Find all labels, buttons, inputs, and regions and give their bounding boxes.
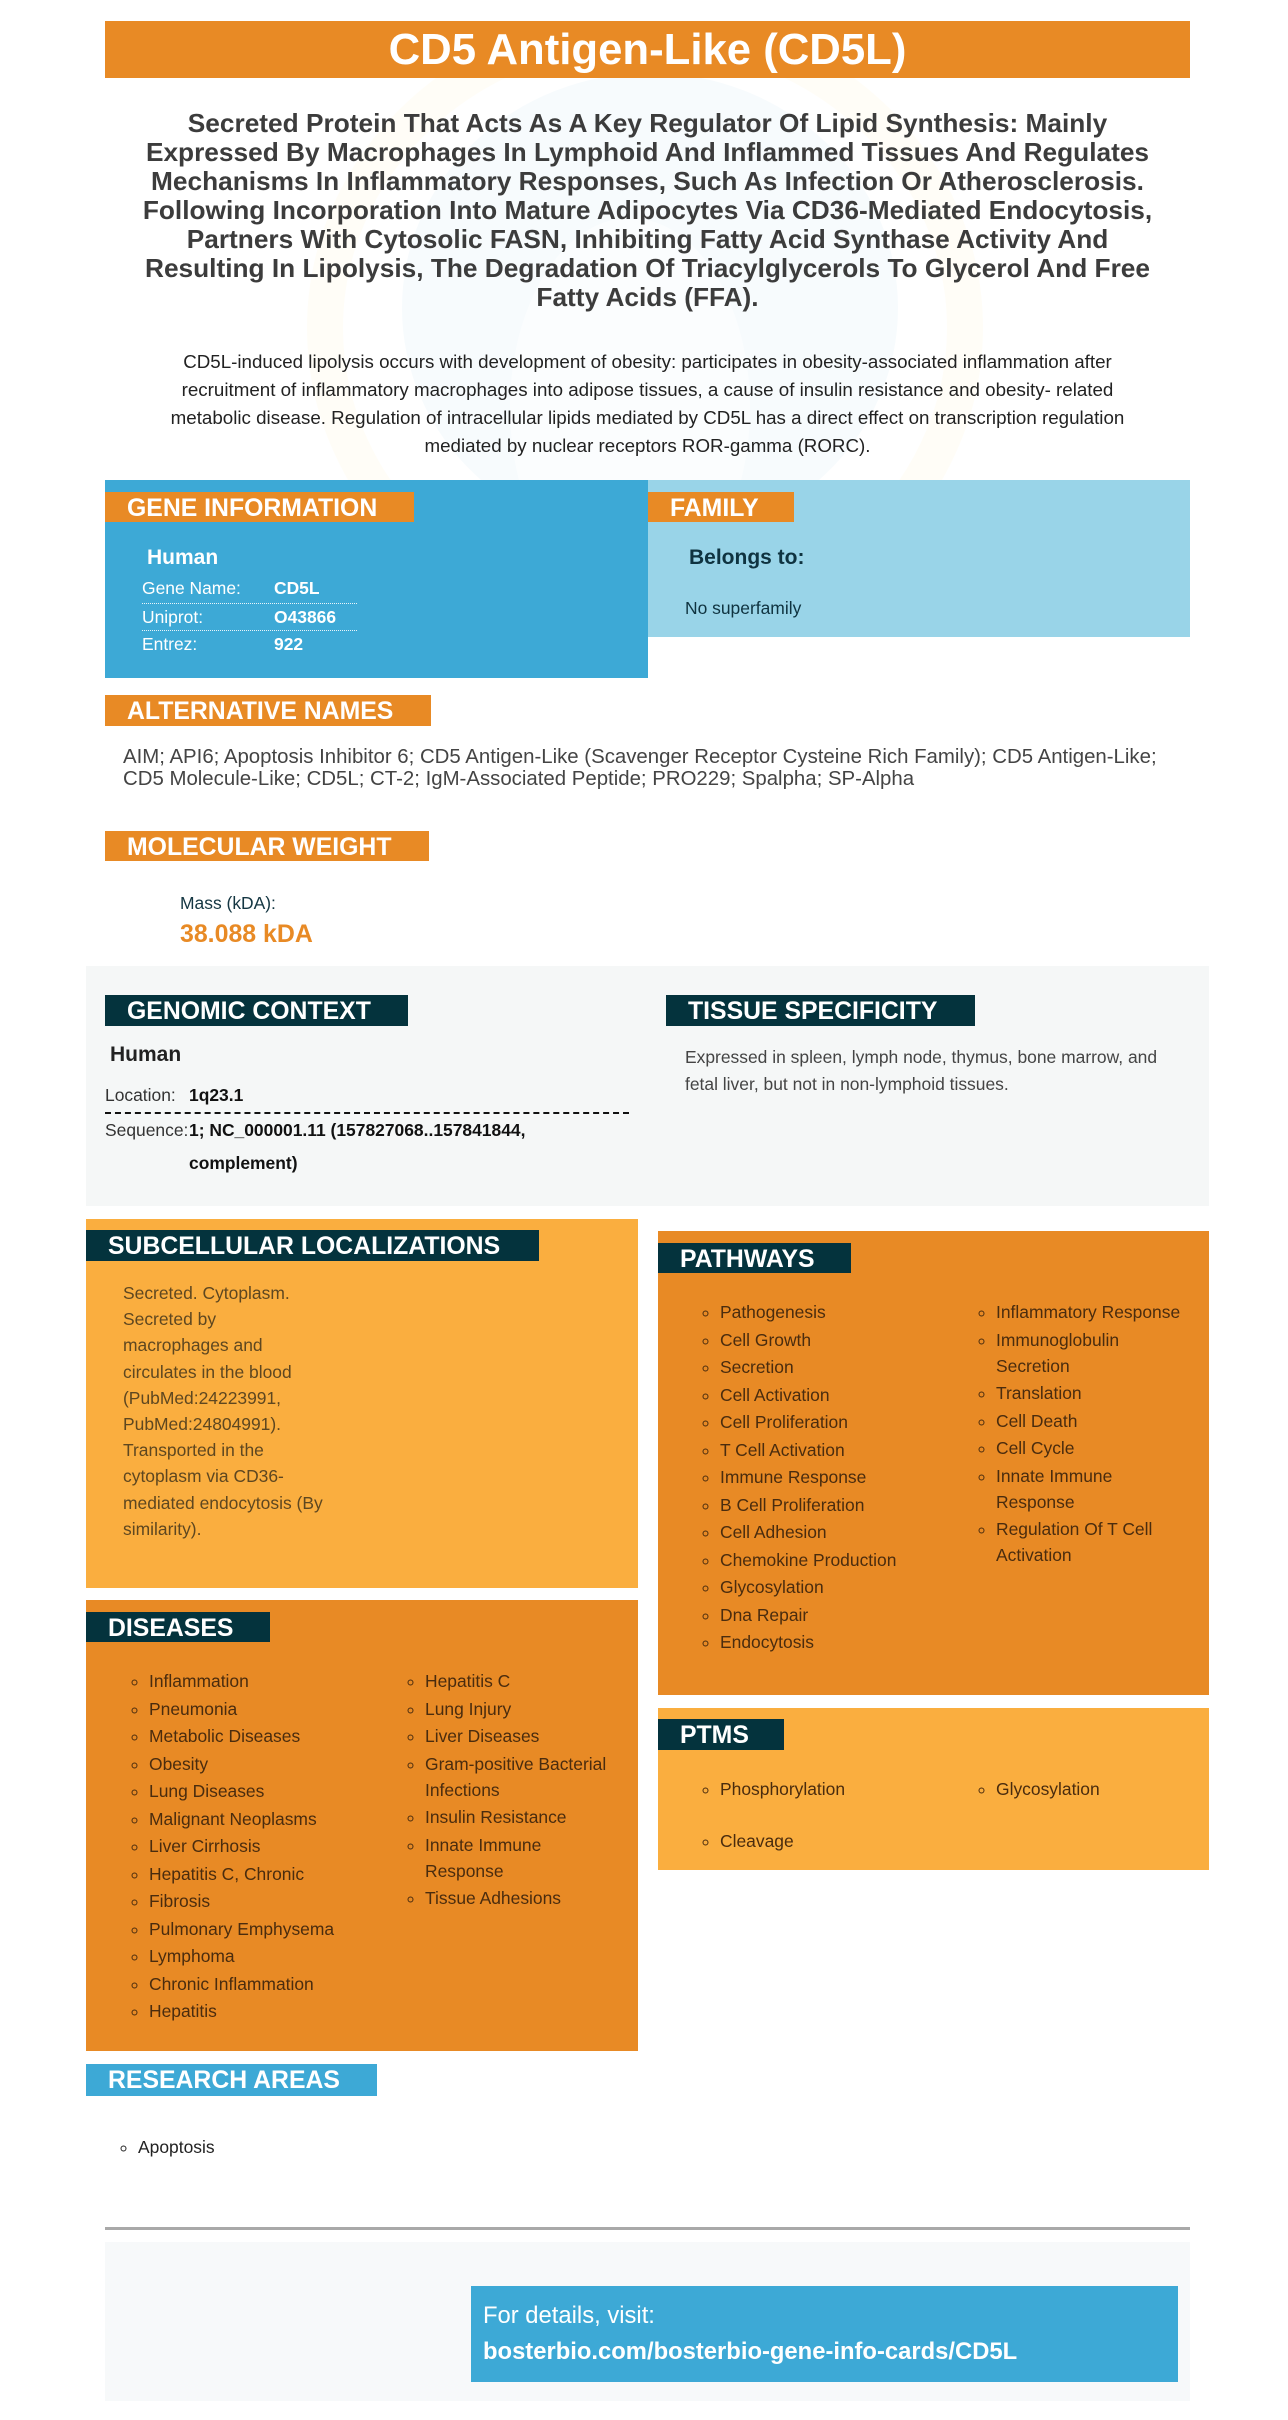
pathways list column 2: Response — [996, 1492, 1075, 1512]
localization text: Secreted. Cytoplasm. — [123, 1283, 290, 1303]
pathways list column 2: Activation — [996, 1545, 1072, 1565]
heading: subcellular localizations: SUBCELLULAR LOCALIZATIONS — [108, 1233, 500, 1260]
diseases list column 1: Malignant Neoplasms — [149, 1808, 317, 1828]
panel: genomic context and tissue specificity — [86, 966, 1209, 1206]
pathways list column 2: Inflammatory Response — [996, 1302, 1180, 1322]
diseases list column 1 — [132, 1671, 334, 2021]
gene name row — [142, 575, 357, 604]
pathways list column 1: Glycosylation — [720, 1577, 824, 1597]
heading: diseases — [86, 1612, 270, 1642]
title banner: CD5 Antigen-Like (CD5L) — [389, 25, 906, 74]
pathways list column 1: Chemokine Production — [720, 1550, 896, 1570]
subtitle: Expressed By Macrophages In Lymphoid And Inflammed Tissues And Regulates — [146, 137, 1149, 167]
pathways list column 1: T Cell Activation — [720, 1440, 845, 1460]
location row — [105, 1082, 629, 1114]
entrez row: 922 — [274, 634, 303, 654]
diseases list column 2 — [408, 1671, 606, 1908]
gene name row: Gene Name: — [142, 578, 241, 598]
pathways list column 1 — [702, 1302, 896, 1652]
description paragraph — [171, 351, 1124, 456]
family value: No superfamily — [685, 598, 801, 618]
pathways list column 1: Immune Response — [720, 1467, 866, 1487]
mass label: Mass (kDA): — [180, 893, 276, 913]
pathways list column 1: Secretion — [720, 1357, 794, 1377]
heading: family — [648, 492, 794, 522]
localization text: (PubMed:24223991, — [123, 1388, 281, 1408]
heading: alternative names: ALTERNATIVE NAMES — [127, 698, 393, 725]
localization text: cytoplasm via CD36- — [123, 1466, 284, 1486]
subtitle: Partners With Cytosolic FASN, Inhibiting Fatty Acid Synthase Activity And — [187, 224, 1108, 254]
diseases list column 1: Fibrosis — [149, 1891, 210, 1911]
localization text: macrophages and — [123, 1335, 263, 1355]
alternative names text: CD5 Molecule-Like; CD5L; CT-2; IgM-Associated Peptide; PRO229; Spalpha; SP-Alpha — [123, 768, 914, 790]
diseases list column 2: Innate Immune — [425, 1834, 541, 1854]
diseases list column 1: Lung Diseases — [149, 1781, 264, 1801]
sequence row — [105, 1120, 525, 1173]
subtitle: Following Incorporation Into Mature Adipocytes Via CD36-Mediated Endocytosis, — [143, 195, 1152, 225]
pathways list column 1: Endocytosis — [720, 1632, 814, 1652]
sequence row: Sequence: — [105, 1120, 188, 1140]
localization text: Secreted by — [123, 1309, 216, 1329]
heading: ptms: PTMS — [680, 1722, 749, 1749]
heading: gene information: GENE INFORMATION — [127, 495, 377, 522]
pathways list column 1: B Cell Proliferation — [720, 1494, 864, 1514]
description paragraph: CD5L-induced lipolysis occurs with development of obesity: participates in obesity-associated inflammation after — [183, 351, 1112, 372]
heading: tissue specificity: TISSUE SPECIFICITY — [688, 998, 937, 1025]
pathways list column 1: Cell Growth — [720, 1330, 811, 1350]
entrez row — [142, 634, 303, 654]
pathways list column 1: Cell Adhesion — [720, 1522, 827, 1542]
ptm list column 1 — [702, 1779, 845, 1851]
panel: diseases — [86, 1600, 638, 2051]
belongs to label: Belongs to: — [689, 546, 804, 569]
diseases list column 2: Tissue Adhesions — [425, 1888, 561, 1908]
research areas list: Apoptosis — [138, 2137, 215, 2157]
heading: genomic context: GENOMIC CONTEXT — [127, 998, 371, 1025]
localization text: mediated endocytosis (By — [123, 1493, 323, 1513]
panel: pathways — [658, 1231, 1209, 1695]
subtitle: Resulting In Lipolysis, The Degradation Of Triacylglycerols To Glycerol And Free — [145, 253, 1150, 283]
panel: gene information — [105, 480, 648, 678]
pathways list column 2: Regulation Of T Cell — [996, 1519, 1152, 1539]
location row: 1q23.1 — [189, 1085, 243, 1105]
diseases list column 1: Metabolic Diseases — [149, 1726, 300, 1746]
molecular weight value — [180, 893, 313, 948]
callout url: bosterbio.com/bosterbio-gene-info-cards/CD5L — [483, 2338, 1017, 2365]
entrez row: Entrez: — [142, 634, 197, 654]
diseases list column 1: Hepatitis C, Chronic — [149, 1864, 304, 1884]
gene name row: CD5L — [274, 578, 320, 598]
description paragraph: recruitment of inflammatory macrophages into adipose tissues, a cause of insulin resistance and obesity- related — [182, 379, 1113, 400]
pathways list column 2: Innate Immune — [996, 1466, 1112, 1486]
pathways list column 2: Cell Death — [996, 1410, 1077, 1430]
panel: ptms — [658, 1708, 1209, 1870]
pathways list column 1: Pathogenesis — [720, 1302, 826, 1322]
sequence row: 1; NC_000001.11 (157827068..157841844, — [189, 1120, 525, 1140]
ptm list column 1: Cleavage — [720, 1831, 794, 1851]
tissue specificity text: Expressed in spleen, lymph node, thymus, bone marrow, and — [685, 1047, 1157, 1067]
mass value: 38.088 kDA — [180, 920, 313, 948]
diseases list column 2: Hepatitis C — [425, 1671, 510, 1691]
heading: molecular weight: MOLECULAR WEIGHT — [127, 834, 391, 861]
diseases list column 1: Pulmonary Emphysema — [149, 1918, 334, 1938]
panel: family — [648, 480, 1190, 637]
localization text: similarity). — [123, 1519, 201, 1539]
callout: details link — [471, 2286, 1178, 2382]
localization text — [123, 1283, 323, 1539]
ptm list column 1: Phosphorylation — [720, 1779, 845, 1799]
species label: Human — [147, 546, 218, 569]
pathways list column 2: Immunoglobulin — [996, 1330, 1119, 1350]
localization text: PubMed:24804991). — [123, 1414, 281, 1434]
localization text: circulates in the blood — [123, 1362, 292, 1382]
alternative names text: AIM; API6; Apoptosis Inhibitor 6; CD5 Antigen-Like (Scavenger Receptor Cysteine Rich Family); CD5 Antigen-Like; — [123, 746, 1157, 768]
pathways list column 1: Cell Activation — [720, 1384, 830, 1404]
species label: Human — [110, 1043, 181, 1066]
diseases list column 2: Liver Diseases — [425, 1726, 539, 1746]
pathways list column 1: Cell Proliferation — [720, 1412, 848, 1432]
alternative names text — [123, 746, 1157, 790]
heading: pathways: PATHWAYS — [680, 1246, 815, 1273]
subtitle — [143, 108, 1152, 312]
location row: Location: — [105, 1085, 176, 1105]
diseases list column 1: Liver Cirrhosis — [149, 1836, 260, 1856]
diseases list column 1: Hepatitis — [149, 2001, 217, 2021]
subtitle: Fatty Acids (FFA). — [536, 282, 759, 312]
ptm list column 2: Glycosylation — [996, 1779, 1100, 1799]
pathways list column 2: Translation — [996, 1383, 1082, 1403]
tissue specificity text: fetal liver, but not in non-lymphoid tissues. — [685, 1074, 1009, 1094]
diseases list column 2: Response — [425, 1860, 504, 1880]
panel: subcellular localizations — [86, 1219, 638, 1588]
diseases list column 1: Chronic Inflammation — [149, 1974, 314, 1994]
uniprot row — [142, 604, 357, 631]
heading: ptms — [658, 1719, 784, 1750]
callout text: For details, visit: — [483, 2302, 655, 2329]
heading: diseases: DISEASES — [108, 1615, 233, 1642]
diseases list column 2: Gram-positive Bacterial — [425, 1754, 606, 1774]
diseases list column 1: Inflammation — [149, 1671, 249, 1691]
subtitle: Secreted Protein That Acts As A Key Regulator Of Lipid Synthesis: Mainly — [188, 108, 1107, 138]
diseases list column 2: Insulin Resistance — [425, 1807, 567, 1827]
pathways list column 1: Dna Repair — [720, 1604, 808, 1624]
diseases list column 1: Lymphoma — [149, 1946, 235, 1966]
uniprot row: O43866 — [274, 607, 336, 627]
description paragraph: mediated by nuclear receptors ROR-gamma (RORC). — [424, 435, 870, 456]
watermark logo — [300, 78, 1000, 480]
diseases list column 1: Obesity — [149, 1754, 208, 1774]
heading: research areas: RESEARCH AREAS — [108, 2067, 340, 2094]
heading: research areas — [86, 2064, 377, 2096]
pathways list column 2 — [978, 1302, 1180, 1565]
title banner — [105, 21, 1190, 78]
pathways list column 2: Secretion — [996, 1356, 1070, 1376]
heading: pathways — [658, 1243, 851, 1273]
description paragraph: metabolic disease. Regulation of intracellular lipids mediated by CD5L has a direct effect on transcription regulation — [171, 407, 1124, 428]
uniprot row: Uniprot: — [142, 607, 203, 627]
pathways list column 2: Cell Cycle — [996, 1438, 1074, 1458]
diseases list column 2: Infections — [425, 1780, 500, 1800]
subtitle: Mechanisms In Inflammatory Responses, Such As Infection Or Atherosclerosis. — [151, 166, 1144, 196]
localization text: Transported in the — [123, 1440, 264, 1460]
heading: family: FAMILY — [670, 495, 759, 522]
diseases list column 2: Lung Injury — [425, 1698, 511, 1718]
sequence row: complement) — [189, 1153, 298, 1173]
panel: footer — [105, 2242, 1190, 2401]
tissue specificity text — [685, 1047, 1157, 1094]
diseases list column 1: Pneumonia — [149, 1698, 237, 1718]
